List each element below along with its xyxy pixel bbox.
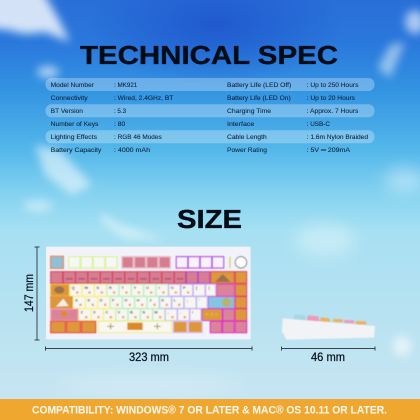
key legends: F [112, 297, 115, 302]
keyboard top view [46, 247, 251, 339]
title: TECHNICAL SPEC [80, 42, 338, 70]
left spec column: : RGB 46 Modes [114, 134, 162, 141]
key legends: W [84, 285, 88, 290]
key legends: K [161, 297, 164, 302]
key legends: R [109, 285, 112, 290]
keycaps [294, 314, 367, 325]
height dimension line [34, 247, 40, 340]
left spec column: : MK921 [114, 82, 138, 89]
key legends: P [183, 285, 186, 290]
right spec column: : Up to 250 Hours [307, 82, 358, 89]
right spec column: Interface [227, 121, 255, 128]
key legends: ] [208, 285, 210, 290]
volume knob [235, 257, 247, 268]
keyboard case [46, 247, 251, 339]
key legends: E [97, 285, 100, 290]
key legends: [ [196, 285, 198, 290]
left spec column: Number of Keys [51, 121, 98, 128]
key legends [72, 285, 210, 315]
right spec column: Power Rating [227, 147, 267, 154]
key legends: D [100, 297, 103, 302]
home row [51, 297, 247, 308]
sub legends [76, 291, 189, 318]
left spec column: Lighting Effects [51, 134, 97, 141]
right spec column: Battery Life (LED On) [227, 95, 291, 102]
bottom row [51, 321, 247, 333]
right spec column: : Up to 20 Hours [307, 95, 355, 102]
left spec column: : 4000 mAh [114, 147, 150, 154]
key legends: V [118, 310, 121, 315]
key legends: Q [72, 285, 75, 290]
key legends: , [168, 310, 169, 315]
key legends: ; [187, 297, 188, 302]
right spec column: : USB-C [307, 121, 330, 128]
key legends: B [130, 310, 133, 315]
right spec column: : Approx. 7 Hours [307, 108, 358, 115]
key legends: L [174, 297, 177, 302]
keyboard side view [282, 314, 375, 340]
led strip [229, 257, 231, 268]
number row [51, 272, 247, 283]
key legends: S [87, 297, 90, 302]
left spec column: : 5.3 [114, 108, 126, 115]
key legends: T [121, 285, 124, 290]
right spec column: Charging Time [227, 108, 271, 115]
key legends: M [154, 310, 158, 315]
qwerty row [51, 284, 247, 296]
left spec column: : Wired, 2.4GHz, BT [114, 95, 173, 102]
key legends: Y [134, 285, 137, 290]
row stripes [46, 78, 374, 143]
key legends: . [180, 310, 181, 315]
left spec column: Connectivity [51, 95, 89, 102]
key legends: O [171, 285, 174, 290]
compatibility footer: COMPATIBILITY: WINDOWS® 7 OR LATER & MAC® OS 10.11 OR LATER. [32, 404, 387, 416]
key legends: ' [199, 297, 200, 302]
left spec column [51, 82, 173, 154]
key legends: A [75, 297, 78, 302]
width dimension line [46, 346, 252, 350]
right spec column: Cable Length [227, 134, 267, 141]
key legends: H [137, 297, 140, 302]
case [282, 318, 375, 340]
key legends: N [142, 310, 145, 315]
right spec column: : 5V ═ 209mA [307, 147, 351, 154]
key legends: G [124, 297, 127, 302]
shift row [51, 309, 247, 321]
compatibility footer [0, 399, 420, 420]
left spec column: Model Number [51, 82, 95, 89]
key legends: C [105, 310, 108, 315]
key legends: I [159, 285, 160, 290]
left spec column: : 80 [114, 121, 126, 128]
left spec column: BT Version [51, 108, 83, 115]
spec table [46, 78, 374, 154]
width label: 323 mm [129, 352, 169, 364]
size heading: SIZE [177, 206, 242, 234]
key legends: J [149, 297, 152, 302]
key legends: U [146, 285, 149, 290]
key legends: Z [81, 310, 84, 315]
key legends: X [93, 310, 96, 315]
key art accents [54, 274, 231, 330]
function row [51, 256, 224, 268]
depth label: 46 mm [311, 352, 345, 364]
right spec column: : 1.6m Nylon Braided [307, 134, 368, 141]
right spec column: Battery Life (LED Off) [227, 82, 291, 89]
height label: 147 mm [24, 274, 36, 312]
left spec column: Battery Capacity [51, 147, 102, 154]
key legends: / [192, 310, 194, 315]
right spec column [227, 82, 368, 154]
depth dimension line [282, 346, 375, 350]
